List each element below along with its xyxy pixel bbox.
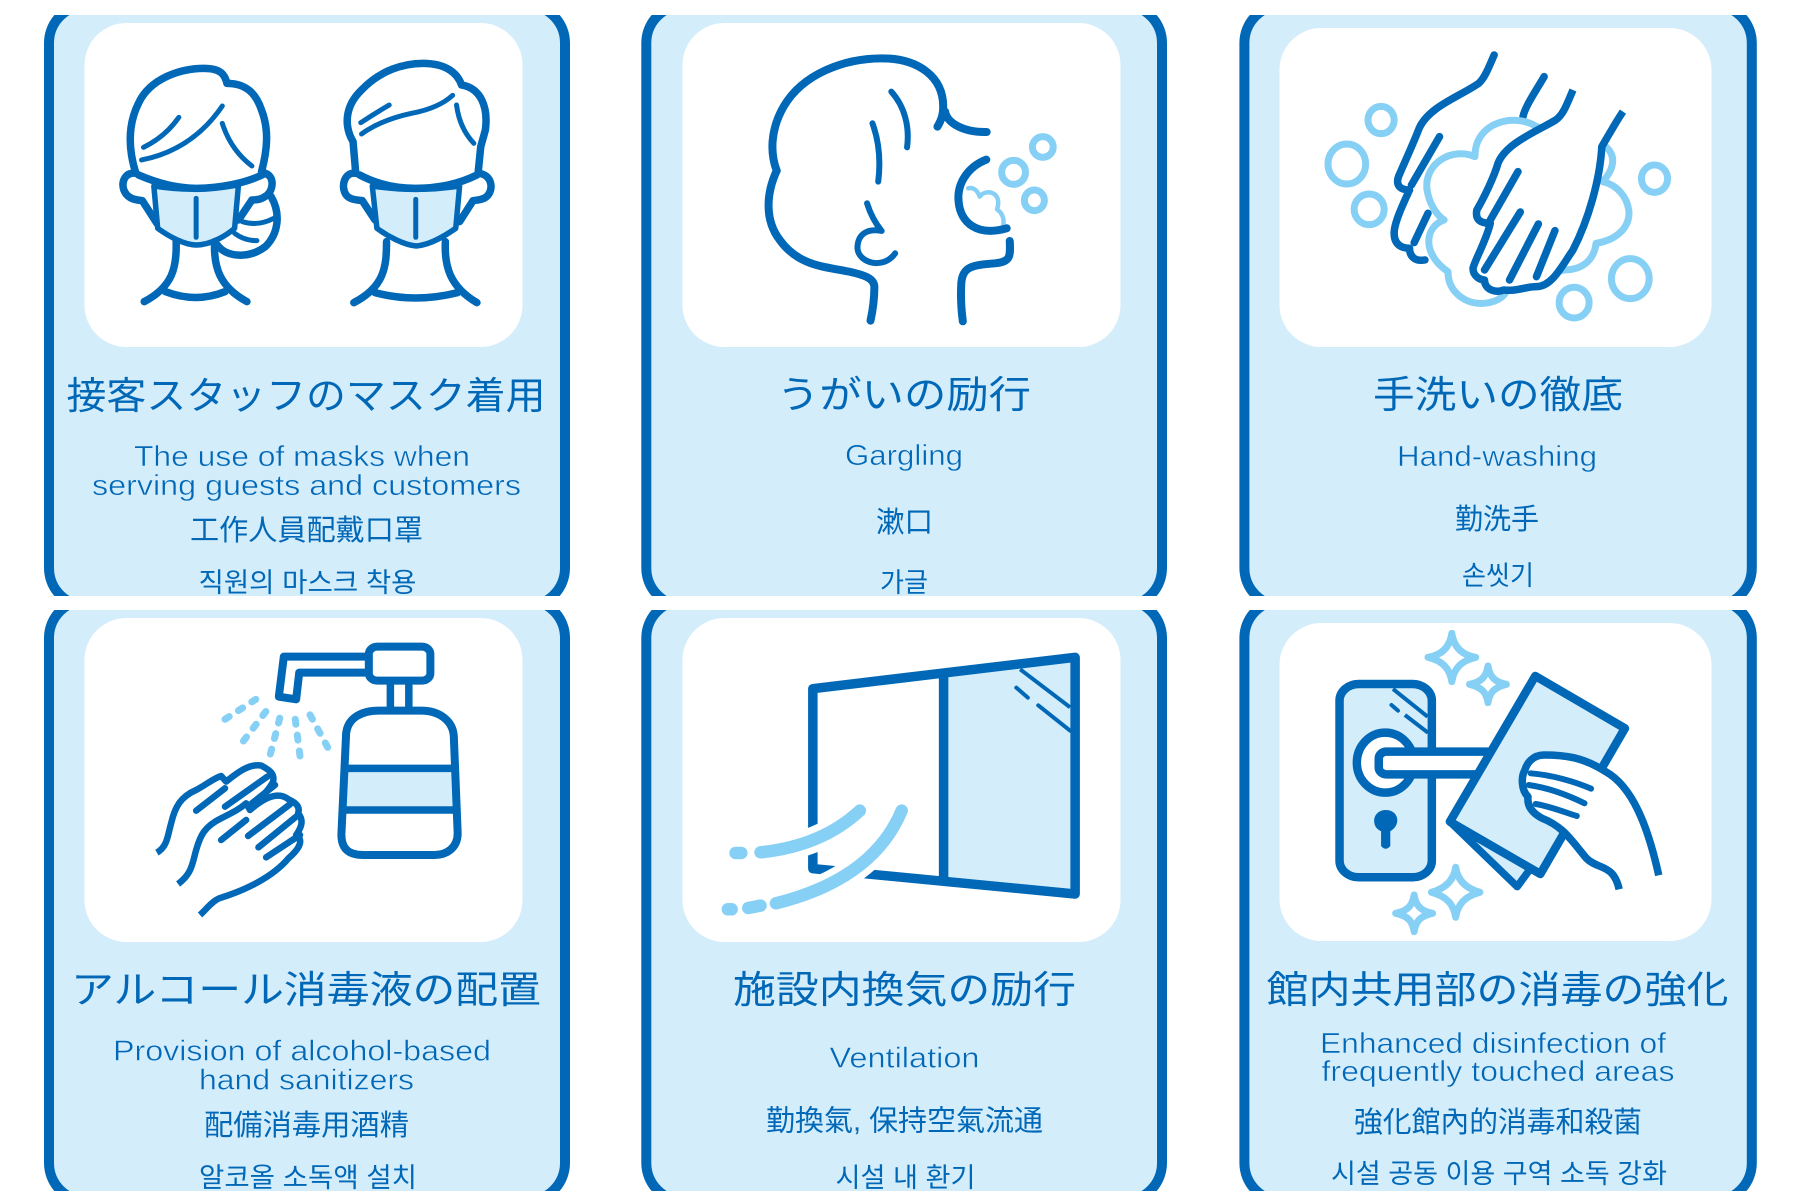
heading: hand washing: 手洗いの徹底 (1373, 375, 1623, 417)
text: korean: 직원의 마스크 착용 (198, 568, 416, 598)
text: chinese: 配備消毒用酒精 (204, 1109, 409, 1142)
panel: ventilation (646, 600, 1162, 1200)
text: english (113, 1036, 491, 1096)
text: korean: 시설 내 환기 (836, 1163, 976, 1193)
icon: two masked faces (123, 63, 491, 303)
panel: alcohol sanitizer (49, 600, 565, 1200)
text: chinese: 工作人員配戴口罩 (190, 514, 423, 547)
text: english: hand sanitizers (199, 1064, 414, 1096)
panel: staff masks (49, 5, 565, 606)
panel: disinfection (1244, 600, 1752, 1200)
text: english: Gargling (845, 440, 963, 472)
panel: gargling (646, 5, 1162, 606)
text: english: Provision of alcohol-based (113, 1036, 491, 1068)
text: english (92, 441, 521, 502)
text: english (1320, 1028, 1674, 1088)
text: english: frequently touched areas (1322, 1056, 1674, 1088)
icon: open window with wind (728, 657, 1075, 909)
heading: ventilation: 施設内換気の励行 (733, 970, 1076, 1012)
text: english: Ventilation (830, 1042, 980, 1074)
panel: hand washing (1244, 5, 1752, 606)
text: english: Hand-washing (1397, 441, 1597, 473)
text: korean: 손씻기 (1462, 561, 1534, 591)
text: korean: 알코올 소독액 설치 (199, 1163, 417, 1193)
text: korean: 가글 (880, 568, 928, 598)
icon: washing hands (1328, 55, 1668, 318)
icon: door handle and cloth (1340, 633, 1659, 932)
text: korean: 시설 공동 이용 구역 소독 강화 (1331, 1159, 1667, 1189)
text: chinese: 漱口 (876, 506, 933, 539)
text: chinese: 強化館內的消毒和殺菌 (1354, 1106, 1642, 1139)
icon: gargling head (769, 58, 1053, 321)
text: chinese: 勤洗手 (1455, 503, 1539, 536)
text: english: The use of masks when (134, 441, 470, 473)
text: english: serving guests and customers (92, 470, 521, 502)
icon: sanitizer bottle and hands (157, 647, 458, 915)
heading: gargling: うがいの励行 (777, 375, 1031, 417)
heading: staff masks: 接客スタッフのマスク着用 (66, 376, 546, 418)
text: english: Enhanced disinfection of (1320, 1028, 1667, 1060)
text: chinese: 勤換氣, 保持空氣流通 (766, 1104, 1043, 1138)
heading: disinfection: 館内共用部の消毒の強化 (1266, 970, 1728, 1012)
heading: alcohol sanitizer: アルコール消毒液の配置 (71, 970, 541, 1012)
